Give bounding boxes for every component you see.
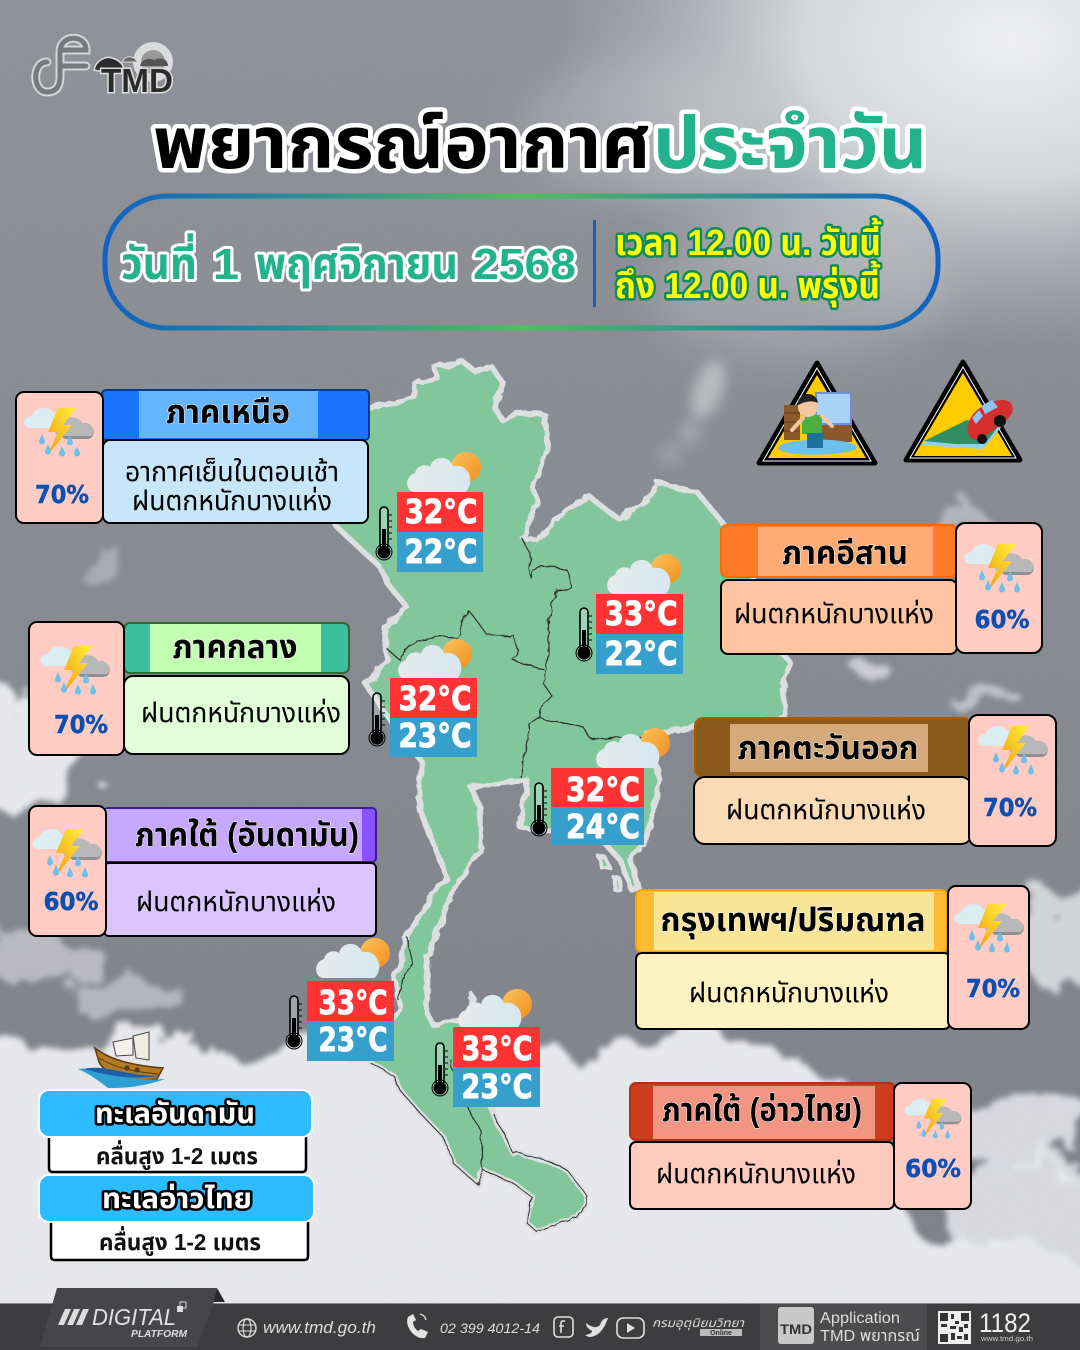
footer tab: digital platform: DIGITAL <box>92 1304 176 1330</box>
date text: วันที่ <box>121 233 197 289</box>
panel: central: 70% <box>54 710 108 739</box>
title: ประจำวัน <box>653 104 927 184</box>
temperature: north: 22°C <box>404 532 478 571</box>
temperature: north <box>376 452 483 572</box>
footer bar <box>0 1288 1080 1350</box>
temperature: south west <box>286 938 394 1061</box>
body: north: อากาศเย็นในตอนเช้า <box>125 456 339 487</box>
temperature: central: 23°C <box>398 716 472 755</box>
validity period: ถึง 12.00 น. พรุ่งนี้ <box>615 260 881 307</box>
phone <box>407 1314 540 1338</box>
body: north: ฝนตกหนักบางแห่ง <box>132 485 332 516</box>
panel: south andaman <box>29 806 376 936</box>
panel: central: ภาคกลาง <box>172 628 298 665</box>
panel: northeast: ภาคอีสาน <box>782 534 908 571</box>
rain chance: north 70%: 70% <box>35 480 89 509</box>
app block: TMD พยากรณ์ <box>820 1328 920 1345</box>
hotline 1182: 1182 <box>979 1308 1031 1338</box>
panel: central: ฝนตกหนักบางแห่ง <box>141 697 341 728</box>
app block: TMD <box>780 1321 812 1337</box>
panel: south gulf: 60% <box>905 1154 961 1183</box>
date text: 2568 <box>473 240 576 289</box>
panel: northeast <box>721 523 1042 654</box>
hotline 1182: www.tmd.go.th <box>980 1336 1033 1343</box>
temperature: south west: 33°C <box>318 983 388 1022</box>
social icons <box>554 1317 644 1338</box>
panel: east: 70% <box>983 793 1037 822</box>
sea panel: andaman: ทะเลอันดามัน <box>95 1098 255 1129</box>
body: north <box>103 440 368 523</box>
temperature: central: 32°C <box>398 679 472 718</box>
validity period: เวลา 12.00 น. วันนี้ <box>615 217 882 263</box>
panel: north <box>16 390 369 523</box>
panel: central <box>29 622 349 755</box>
rain chance: north 70% <box>16 392 103 523</box>
logo mark: DIGITAL <box>36 38 86 92</box>
qr code <box>938 1311 971 1344</box>
department name <box>652 1316 745 1337</box>
sea panel: gulf of thailand <box>39 1175 314 1260</box>
icon: ship <box>78 1032 165 1088</box>
panel: east: ภาคตะวันออก <box>738 729 918 766</box>
validity period <box>615 217 882 307</box>
temperature: north: 32°C <box>404 492 478 531</box>
panel: bangkok: ฝนตกหนักบางแห่ง <box>689 977 889 1008</box>
panel: south andaman: ฝนตกหนักบางแห่ง <box>136 886 336 917</box>
department name: Online <box>710 1330 732 1337</box>
panel: south gulf: ภาคใต้ (อ่าวไทย) <box>662 1091 862 1128</box>
app block: Application <box>820 1310 900 1327</box>
app block <box>778 1307 920 1345</box>
panel: bangkok: 70% <box>966 974 1020 1003</box>
sea panel: andaman: คลื่นสูง 1-2 เมตร <box>96 1140 258 1170</box>
sea panel: andaman <box>39 1090 312 1172</box>
website: www.tmd.go.th <box>263 1318 376 1337</box>
temperature: east: 24°C <box>566 807 640 846</box>
footer tab: digital platform <box>40 1288 225 1347</box>
header: north <box>102 390 369 440</box>
logo: TMD: TMD <box>101 62 173 99</box>
temperature: northeast <box>576 554 683 674</box>
date text: 1 <box>213 240 239 289</box>
phone: 02 399 4012-14 <box>440 1320 540 1336</box>
panel: northeast: ฝนตกหนักบางแห่ง <box>734 598 934 629</box>
panel: south gulf <box>630 1083 971 1209</box>
panel: northeast: 60% <box>974 605 1030 634</box>
header: north: ภาคเหนือ <box>166 393 290 430</box>
logo: TMD <box>36 38 173 99</box>
date text <box>121 233 576 289</box>
date text: พฤศจิกายน <box>256 240 458 289</box>
temperature: south east: 23°C <box>462 1067 532 1106</box>
warning icon: flood <box>759 363 875 463</box>
title: พยากรณ์อากาศ <box>153 104 651 184</box>
panel: south andaman: 60% <box>44 887 98 916</box>
temperature: south west: 23°C <box>318 1020 388 1059</box>
panel: east <box>694 715 1056 846</box>
temperature: east <box>531 728 670 846</box>
temperature: northeast: 33°C <box>604 594 678 633</box>
panel: east: ฝนตกหนักบางแห่ง <box>726 794 926 825</box>
panel: bangkok <box>636 886 1029 1029</box>
panel: bangkok: กรุงเทพฯ/ปริมณฑล <box>660 901 926 940</box>
temperature: central <box>369 639 477 757</box>
footer tab: digital platform: PLATFORM <box>131 1329 188 1340</box>
warning icon: car on field <box>906 362 1020 460</box>
department name: กรมอุตุนิยมวิทยา <box>652 1316 745 1331</box>
temperature: south east <box>432 989 540 1107</box>
title <box>153 104 927 184</box>
temperature: south east: 33°C <box>462 1029 532 1068</box>
temperature: east: 32°C <box>566 770 640 809</box>
temperature: northeast: 22°C <box>604 634 678 673</box>
sea panel: gulf of thailand: คลื่นสูง 1-2 เมตร <box>99 1226 261 1256</box>
panel: south andaman: ภาคใต้ (อันดามัน) <box>135 816 359 853</box>
panel: south gulf: ฝนตกหนักบางแห่ง <box>656 1158 856 1189</box>
sea panel: gulf of thailand: ทะเลอ่าวไทย <box>102 1183 252 1214</box>
map of Thailand <box>320 362 790 1232</box>
date panel <box>105 196 938 328</box>
